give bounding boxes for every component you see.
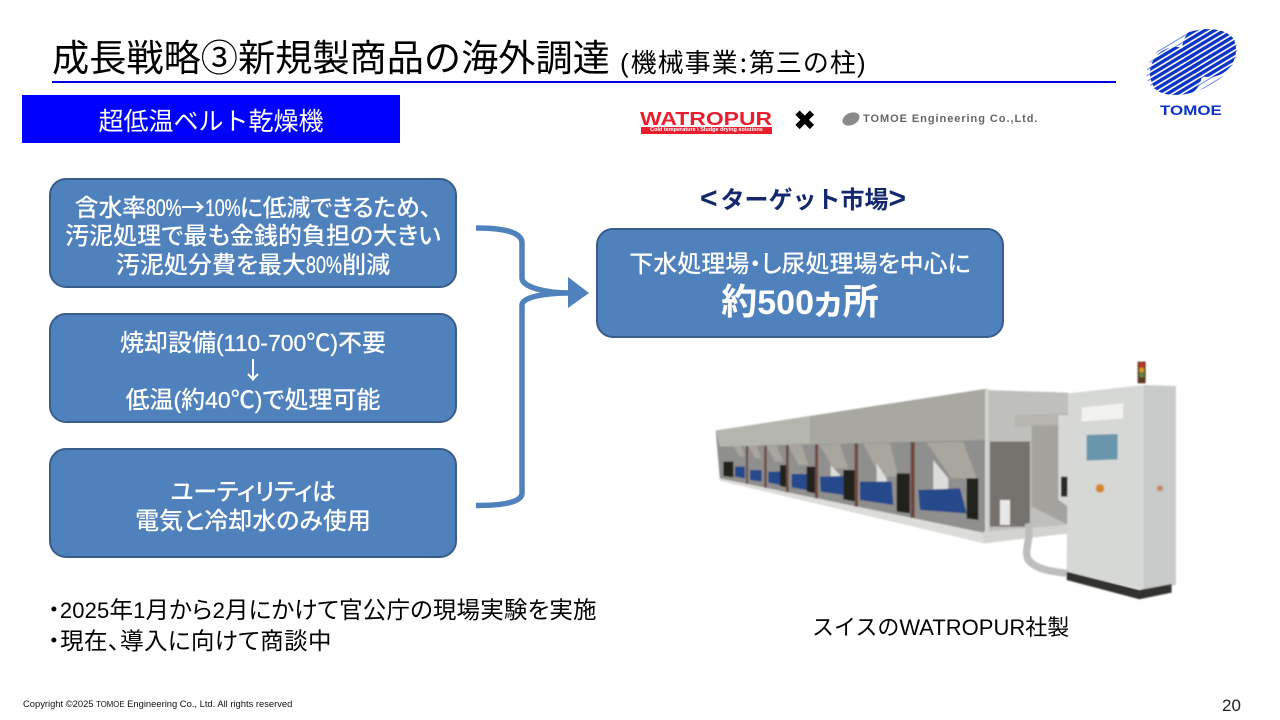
section label: 超低温ベルト乾燥機	[98, 102, 324, 138]
panel: reason 3: 電気と冷却水のみ使用	[135, 500, 371, 536]
panel: reason 1: 80%	[146, 195, 181, 222]
icon: TOMOE logo	[1146, 29, 1238, 95]
footer: copyright: Copyright ©2025 TOMOE Engineering Co., Ltd. All rights reserved	[23, 698, 292, 709]
panel: reason 2	[49, 313, 457, 423]
control cabinet	[1067, 362, 1176, 599]
duct hose	[1027, 523, 1067, 573]
panel: reason 2: 焼却設備(110-700℃)不要	[120, 323, 386, 358]
panel: reason 1	[49, 178, 457, 288]
panel: reason 1: 10%	[205, 195, 240, 222]
title underline	[52, 81, 1116, 83]
logo wordmark: TOMOE: TOMOE	[1160, 102, 1222, 118]
panel: target market: 下水処理場・し尿処理場を中心に	[629, 244, 971, 279]
copper posts	[746, 442, 915, 518]
panel: reason 3: ユーティリティは	[170, 472, 336, 507]
dark condensers	[723, 462, 978, 520]
logo: TOMOE Engineering: TOMOE Engineering Co.,Ltd.	[863, 113, 1038, 125]
white interior panels	[831, 460, 948, 493]
panel: reason 1: 汚泥処理で最も金銭的負担の大きい	[65, 216, 441, 251]
panel: reason 1: 含水率 → に低減できるため、	[75, 188, 431, 223]
compressor units	[735, 467, 967, 513]
icon: cross mark: ✖	[793, 104, 816, 137]
panel: target market	[596, 228, 1004, 338]
title: 成長戦略③新規製商品の海外調達	[52, 28, 610, 82]
hoppers	[733, 442, 977, 478]
panel: reason 2: ↓	[241, 351, 265, 386]
page number: 20	[1222, 696, 1241, 715]
panel: reason 1: 80%	[306, 252, 342, 279]
heading: target market: <ターゲット市場>	[700, 180, 906, 215]
caption: machine: スイスのWATROPUR社製	[812, 615, 1069, 640]
text block: status notes: ・現在、導入に向けて商談中	[48, 622, 332, 656]
panel: reason 3	[49, 448, 457, 558]
text block: status notes: ・2025年1月から2月にかけて官公庁の現場実験を実施	[48, 591, 597, 625]
subtitle: (機械事業:第三の柱)	[620, 43, 867, 80]
panel: reason 1: 汚泥処分費を最大 削減	[116, 245, 390, 280]
text block: status notes	[48, 591, 597, 656]
logo: WATROPUR: Cold temperature \ Sludge drying solutions	[650, 127, 763, 133]
section label	[22, 95, 400, 143]
panel: target market: 約500ヵ所	[721, 273, 879, 325]
panel: reason 2: 低温(約40℃)で処理可能	[125, 380, 381, 415]
logo: WATROPUR: WATROPUR	[640, 108, 772, 129]
